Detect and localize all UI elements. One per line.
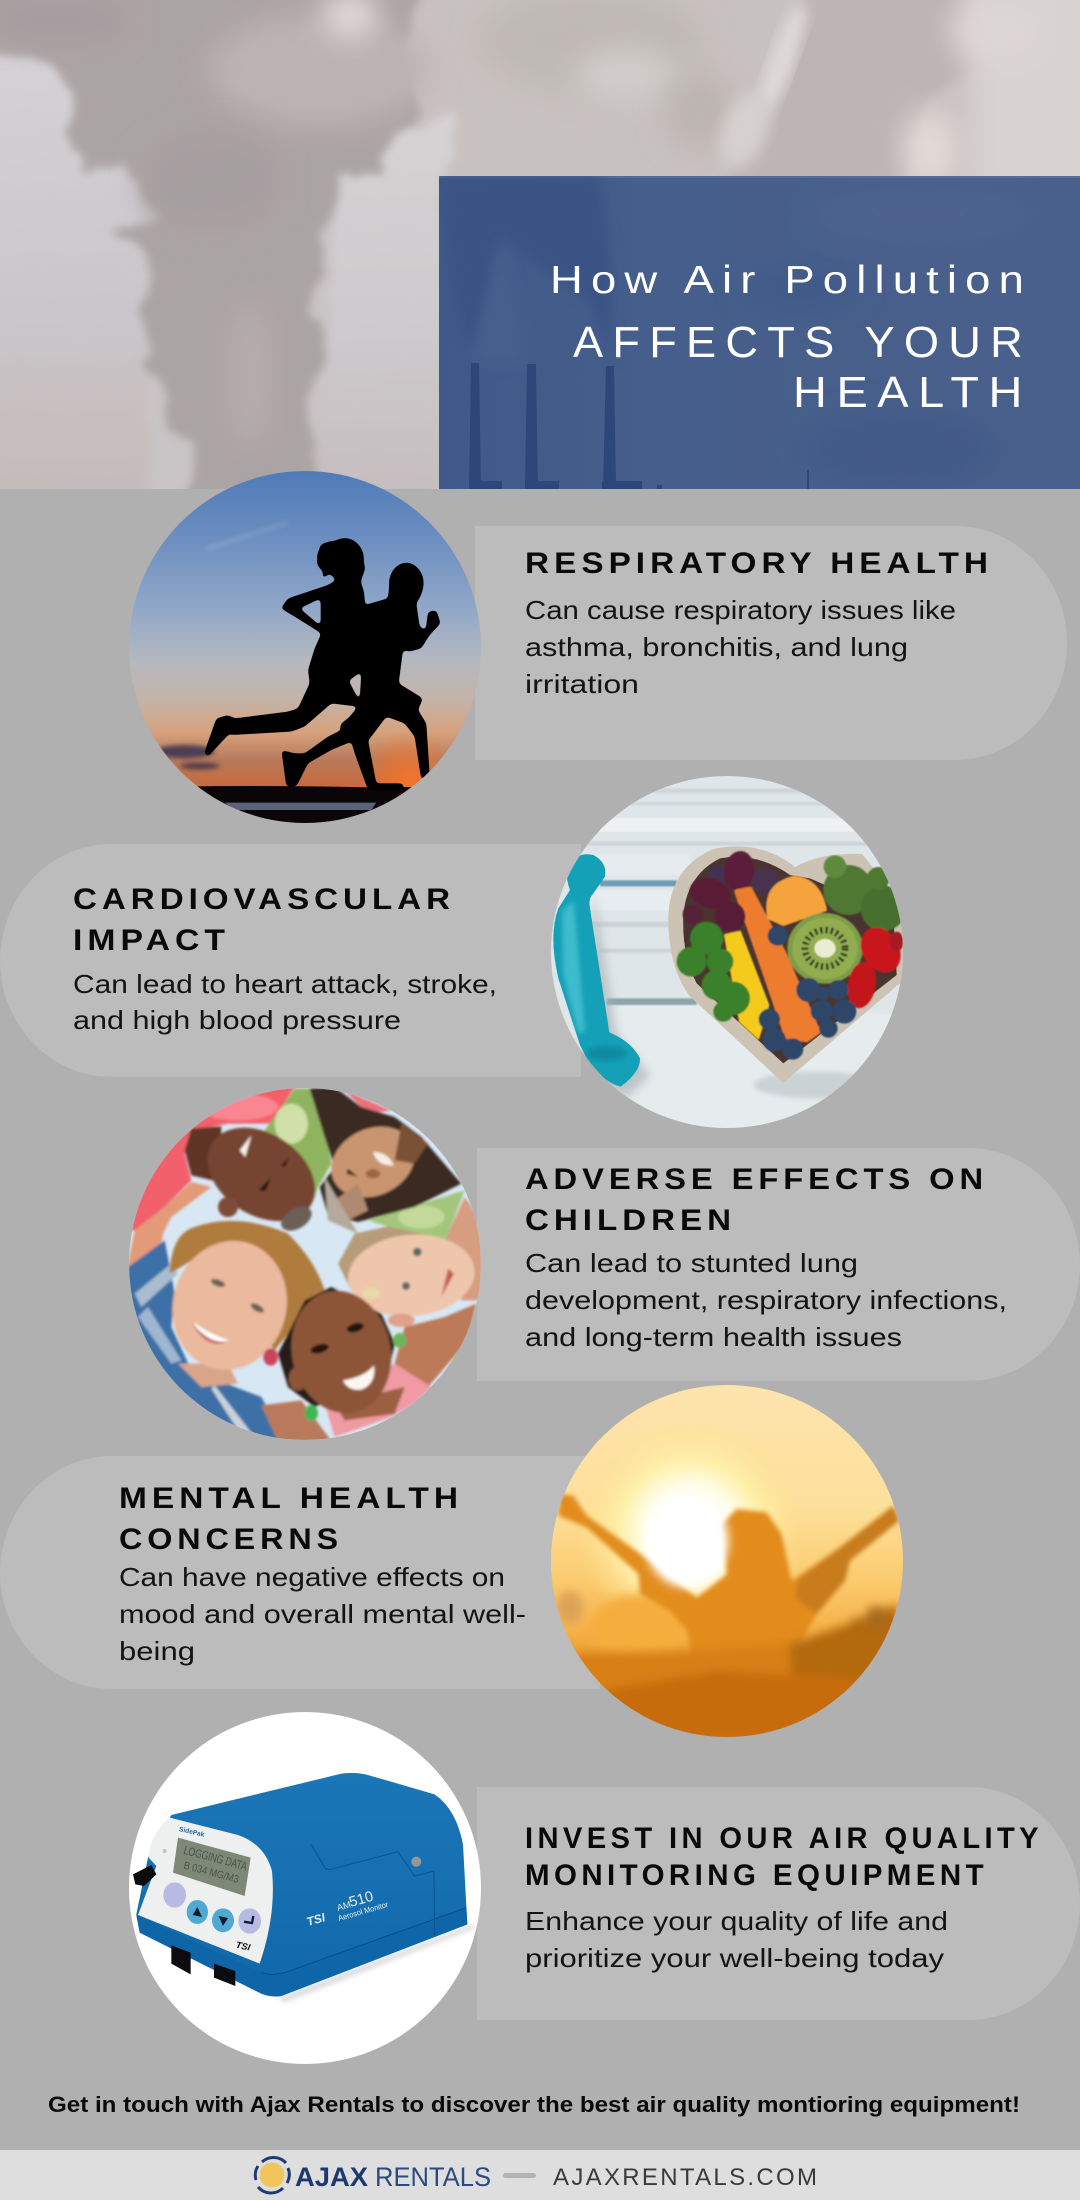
- upper smoke layer: [0, 0, 1080, 190]
- fruit and vegetables: [677, 849, 909, 1060]
- panel: mental health concerns: [0, 1456, 600, 1689]
- title line 2: AFFECTS YOUR: [573, 318, 1032, 367]
- title line 1: How Air Pollution: [550, 259, 1032, 302]
- dark clouds and contrail: [155, 522, 288, 769]
- hero photo: smoke plumes: [0, 0, 1080, 520]
- body text: and high blood pressure: [73, 1005, 401, 1035]
- drop shadow: [278, 1924, 476, 2003]
- photo: runners at sunset: [128, 470, 482, 824]
- girl with dark hair: [310, 1087, 461, 1222]
- silhouette: [558, 1494, 899, 1661]
- white face plate: [138, 1818, 273, 1964]
- heading: INVEST IN OUR AIR QUALITY: [525, 1822, 1043, 1855]
- wooden heart bowl: [669, 847, 904, 1082]
- website: AJAXRENTALS.COM: [553, 2164, 822, 2191]
- device body: [136, 1773, 467, 1996]
- body text: Can lead to heart attack, stroke,: [73, 969, 497, 999]
- runner silhouettes: [204, 538, 441, 790]
- heading: [525, 1822, 1043, 1892]
- arm at right: [445, 1197, 482, 1300]
- dash: [503, 2173, 536, 2178]
- inlet nozzle: [133, 1865, 156, 1886]
- panel: respiratory health: [475, 526, 1067, 760]
- printed labels: [305, 1889, 390, 1929]
- body text: [525, 1906, 948, 1973]
- pink clothing top left: [128, 1087, 295, 1230]
- footer bar: [0, 2150, 1080, 2200]
- logo wordmark: AJAX: [295, 2162, 368, 2192]
- ground: [550, 1604, 904, 1738]
- heading: CARDIOVASCULAR: [73, 883, 455, 916]
- body text: Can have negative effects on: [119, 1562, 505, 1592]
- brand label: SidePak: [178, 1826, 205, 1839]
- photo: children in a circle: [128, 1087, 482, 1441]
- panel: adverse effects on children: [477, 1148, 1080, 1381]
- distant clouds left: [590, 1588, 688, 1648]
- foliage: [265, 1089, 331, 1202]
- heading: [73, 883, 455, 957]
- main plume: [0, 0, 420, 520]
- power plant chimneys: [469, 363, 809, 489]
- buttons: [163, 1882, 261, 1934]
- heading: MENTAL HEALTH: [119, 1482, 463, 1515]
- body text: asthma, bronchitis, and lung: [525, 632, 908, 662]
- foot slots: [171, 1945, 235, 1986]
- pale sky at left: [0, 56, 144, 489]
- girl at bottom: [278, 1287, 395, 1407]
- dark boy: [185, 1126, 221, 1182]
- lower right arm: [395, 1304, 476, 1387]
- screw: [411, 1857, 421, 1867]
- heading: CHILDREN: [525, 1204, 736, 1237]
- heading: [525, 1163, 988, 1237]
- right plume: [734, 0, 961, 176]
- panel: invest in monitoring equipment: [477, 1787, 1080, 2020]
- heading: ADVERSE EFFECTS ON: [525, 1163, 988, 1196]
- body text: [73, 969, 497, 1035]
- curly-haired boy: [170, 1221, 325, 1350]
- panel smoke streaks: [440, 176, 606, 322]
- body text: Can lead to stunted lung: [525, 1248, 858, 1278]
- printed labels: 510: [347, 1889, 375, 1911]
- title line 3: HEALTH: [793, 368, 1032, 417]
- arm at left: [128, 1182, 211, 1269]
- printed labels: AM: [336, 1899, 352, 1913]
- soft highlights in plume: [210, 15, 430, 125]
- printed labels: Aerosol Monitor: [337, 1900, 390, 1923]
- body text: and long-term health issues: [525, 1322, 902, 1352]
- body text: [525, 595, 956, 699]
- blue shirt: [128, 1240, 285, 1441]
- photo: person with raised arms at sunrise: [550, 1384, 904, 1738]
- body text: development, respiratory infections,: [525, 1285, 1007, 1315]
- call to action: Get in touch with Ajax Rentals to discover the best air quality montioring equipment!: [48, 2092, 1020, 2117]
- heading: IMPACT: [73, 924, 230, 957]
- title panel: [439, 176, 1080, 490]
- logo icon: [255, 2158, 289, 2193]
- logo wordmark: [295, 2162, 491, 2192]
- printed labels: TSI: [305, 1910, 327, 1929]
- ground: [197, 786, 412, 823]
- LCD display: B 034 MG/M3: [182, 1860, 240, 1886]
- dumbbell: [553, 854, 650, 1098]
- blond child: [336, 1225, 422, 1286]
- heading: RESPIRATORY HEALTH: [525, 547, 993, 580]
- logo wordmark: RENTALS: [375, 2162, 491, 2192]
- heading: MONITORING EQUIPMENT: [525, 1859, 988, 1892]
- body text: being: [119, 1636, 195, 1666]
- LCD display: LOGGING DATA: [182, 1843, 249, 1873]
- body text: mood and overall mental well-: [119, 1599, 526, 1629]
- body text: Enhance your quality of life and: [525, 1906, 948, 1936]
- pale sky at right of plume: [334, 112, 457, 311]
- wood planks: [583, 788, 897, 1129]
- body text: [119, 1562, 526, 1666]
- body text: Can cause respiratory issues like: [525, 595, 956, 625]
- TSI tag: TSI: [235, 1940, 252, 1953]
- body text: [525, 1248, 1007, 1352]
- photo: heart of fruit and dumbbell: [550, 775, 909, 1129]
- panel: cardiovascular impact: [0, 844, 581, 1077]
- parsley: [677, 922, 750, 1022]
- sun disc: [645, 1494, 728, 1587]
- heading: CONCERNS: [119, 1523, 343, 1556]
- photo: aerosol monitor device: [128, 1711, 482, 2065]
- heading: [119, 1482, 463, 1556]
- body text: prioritize your well-being today: [525, 1943, 944, 1973]
- LCD display: [173, 1838, 251, 1896]
- body text: irritation: [525, 669, 639, 699]
